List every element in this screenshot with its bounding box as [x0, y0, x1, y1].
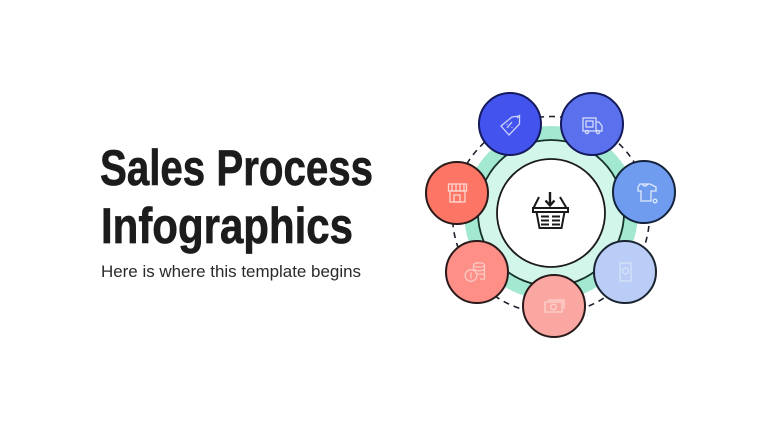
- step: mobile phone: [594, 241, 656, 303]
- icon: shopping basket: [533, 192, 568, 228]
- icon: truck: [583, 118, 602, 134]
- subtitle: Here is where this template begins: [101, 263, 361, 281]
- light mint inner ring: [478, 140, 624, 286]
- diagram: sales process cycle: [426, 93, 675, 337]
- step: t-shirt: [613, 161, 675, 223]
- title: Sales Process: [100, 140, 373, 196]
- mint outer band: [464, 126, 638, 300]
- icon: phone: [620, 263, 631, 281]
- icon: coins: [465, 263, 484, 281]
- step: coins: [446, 241, 508, 303]
- icon: banknote: [545, 300, 564, 312]
- icon: price tag: [501, 115, 520, 135]
- step: price tag: [479, 93, 541, 155]
- step: banknote: [523, 275, 585, 337]
- title: Infographics: [101, 198, 353, 254]
- title: [100, 140, 373, 254]
- icon: t-shirt: [638, 184, 657, 203]
- step: storefront: [426, 162, 488, 224]
- center circle: [497, 159, 605, 267]
- icon: store: [448, 184, 466, 202]
- step: delivery truck: [561, 93, 623, 155]
- dashed outer ring: [452, 116, 650, 314]
